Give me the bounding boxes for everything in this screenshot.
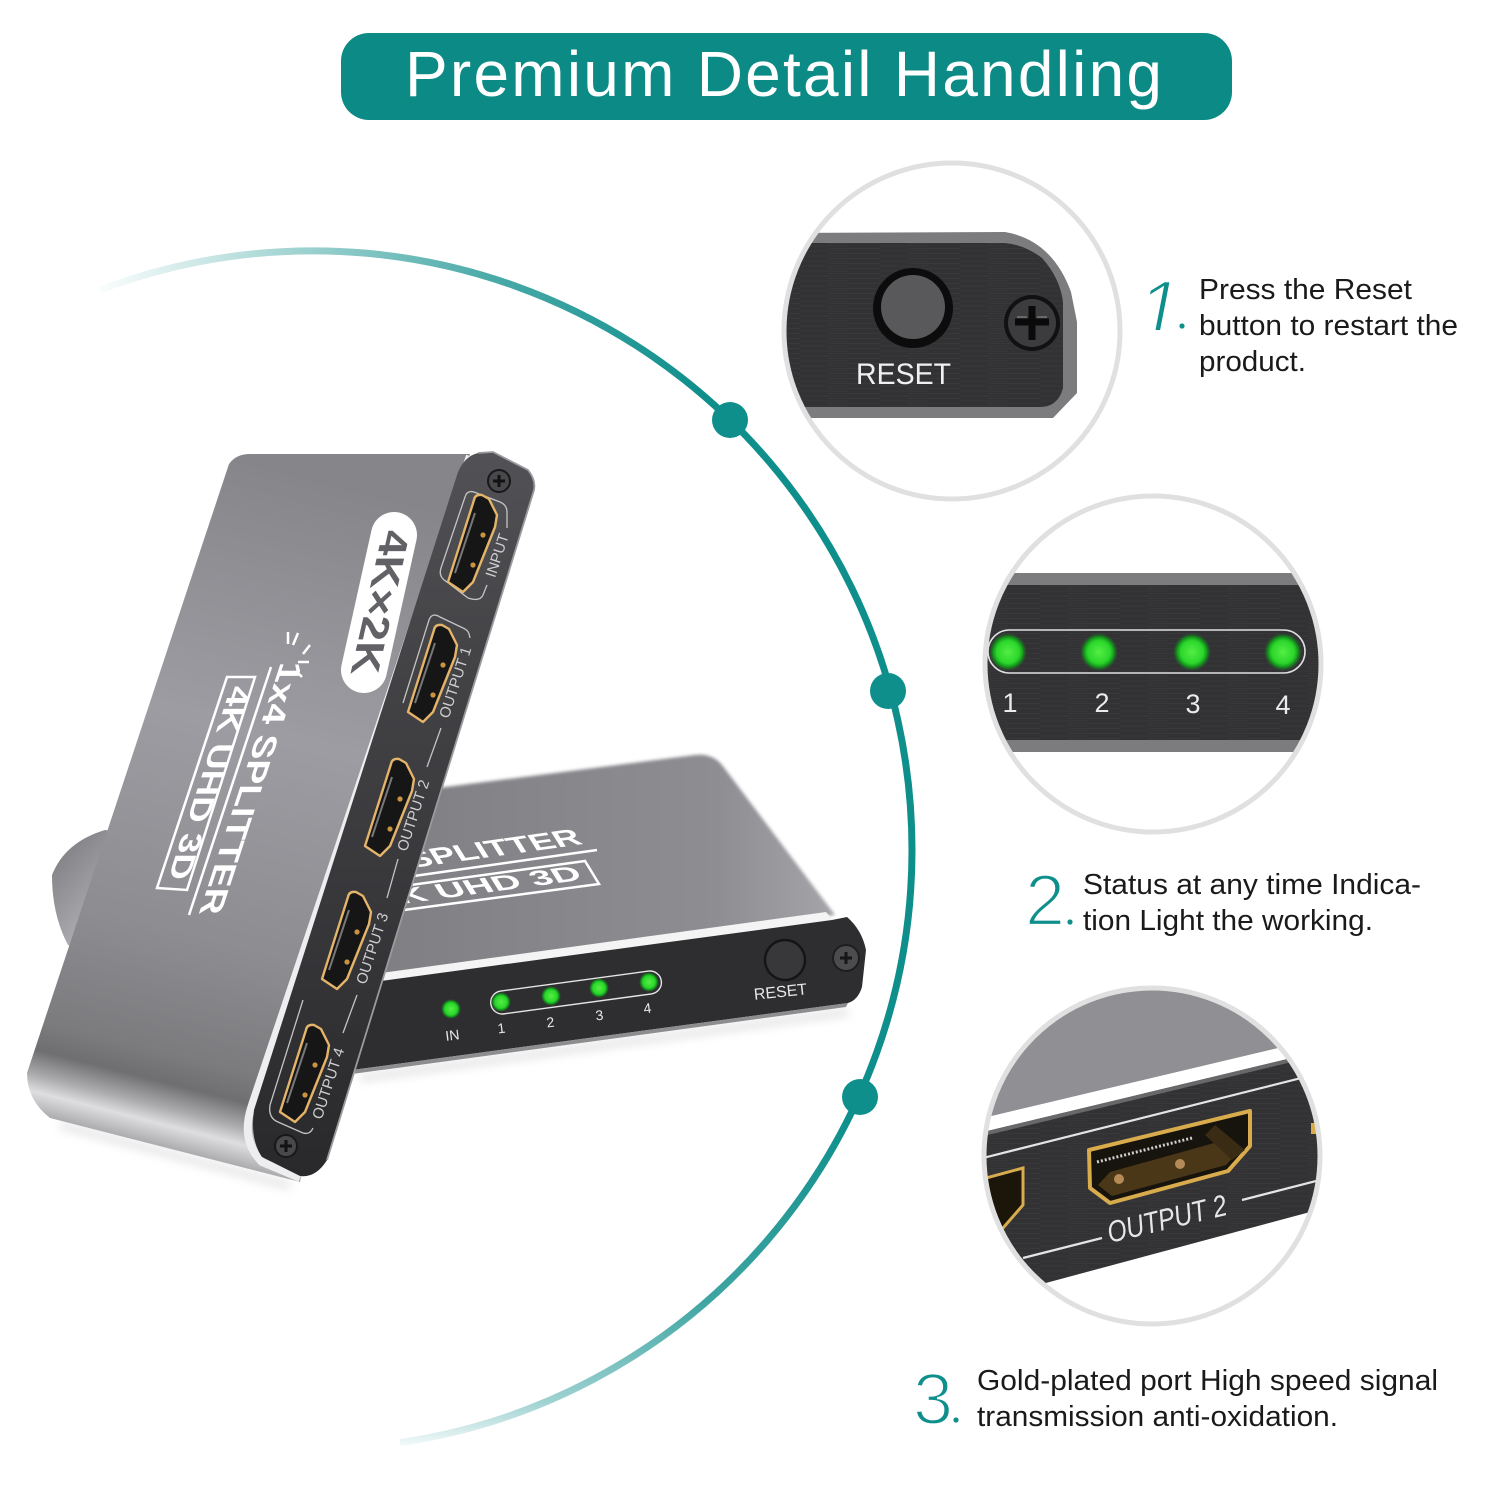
port labels	[309, 532, 513, 1121]
product photo: HDMI splitter pair	[27, 452, 866, 1186]
port bracket lines	[270, 492, 507, 1133]
ground shadows	[60, 1012, 848, 1186]
back device silver strip	[381, 912, 834, 982]
back device far edge	[52, 830, 170, 960]
port labels: OUTPUT 2	[394, 778, 433, 853]
back device status lights: 1	[497, 1020, 506, 1036]
back device reset button and screw	[753, 940, 859, 1004]
back device reset button and screw: RESET	[753, 981, 808, 1004]
callout 3 text: transmission anti-oxidation.	[977, 1401, 1338, 1433]
callout 1 text: Press the Reset	[1199, 274, 1412, 306]
standing device body	[27, 454, 470, 1182]
callout 3 text: 3	[913, 1360, 953, 1440]
port labels: OUTPUT 3	[353, 911, 392, 986]
back device printed text	[389, 825, 599, 910]
4K×2K badge: 4K×2K	[341, 530, 418, 674]
back device status lights	[441, 970, 663, 1044]
decorative arc connecting the callouts	[100, 251, 912, 1443]
callout 1 text: button to restart the	[1199, 310, 1458, 342]
back device printed text: SPLITTER	[400, 825, 588, 873]
back device printed text: K UHD 3D	[390, 861, 587, 909]
side port fragment	[988, 1166, 1024, 1230]
light numbers: 2	[1094, 688, 1110, 718]
callout 2 text: 2	[1025, 861, 1065, 941]
standing device printed text: 1x4 SPLITTER	[192, 662, 310, 915]
port labels: OUTPUT 4	[309, 1046, 348, 1121]
light numbers: 4	[1275, 690, 1291, 720]
port label: OUTPUT 2	[1104, 1189, 1231, 1250]
light track	[988, 630, 1305, 673]
title banner: Premium Detail Handling	[405, 38, 1162, 110]
back device status lights: 3	[595, 1007, 604, 1023]
light numbers: 1	[1002, 688, 1018, 718]
lights	[989, 633, 1027, 671]
callout 1 text	[1150, 278, 1457, 377]
HDMI ports	[280, 495, 497, 1122]
standing device printed text: 4K UHD 3D	[161, 686, 257, 880]
reset button	[873, 268, 953, 348]
callout circle 2: status lights	[980, 496, 1330, 832]
callout 2 text: Status at any time Indica-	[1083, 869, 1421, 901]
light numbers: 3	[1185, 689, 1201, 719]
light numbers	[1004, 693, 1290, 714]
callout 2 text: tion Light the working.	[1083, 905, 1373, 937]
back device status lights: IN	[444, 1026, 460, 1044]
callout 1 text: 1	[1137, 264, 1182, 353]
screw	[1004, 295, 1060, 351]
back device top face	[360, 755, 835, 982]
callout 3 text: Gold-plated port High speed signal	[977, 1365, 1438, 1397]
reset label: RESET	[856, 358, 951, 391]
back device status lights: 2	[546, 1014, 555, 1030]
callout circle 1: reset button	[770, 163, 1120, 499]
callout 1 text: product.	[1199, 346, 1306, 378]
standing device port panel	[253, 452, 534, 1176]
standing device printed text	[157, 632, 310, 915]
panel screws	[275, 470, 510, 1157]
port labels: INPUT	[483, 532, 513, 580]
main HDMI port	[1089, 1111, 1250, 1203]
callout 3 text	[913, 1360, 1438, 1440]
silver edge strip	[248, 456, 470, 1178]
callout circle 3: gold-plated port	[975, 980, 1325, 1324]
plate	[805, 232, 1077, 418]
back device status lights: 4	[643, 1000, 652, 1016]
callout 2 text	[1025, 861, 1421, 941]
back device front panel	[350, 917, 866, 1070]
port labels: OUTPUT 1	[436, 645, 475, 720]
